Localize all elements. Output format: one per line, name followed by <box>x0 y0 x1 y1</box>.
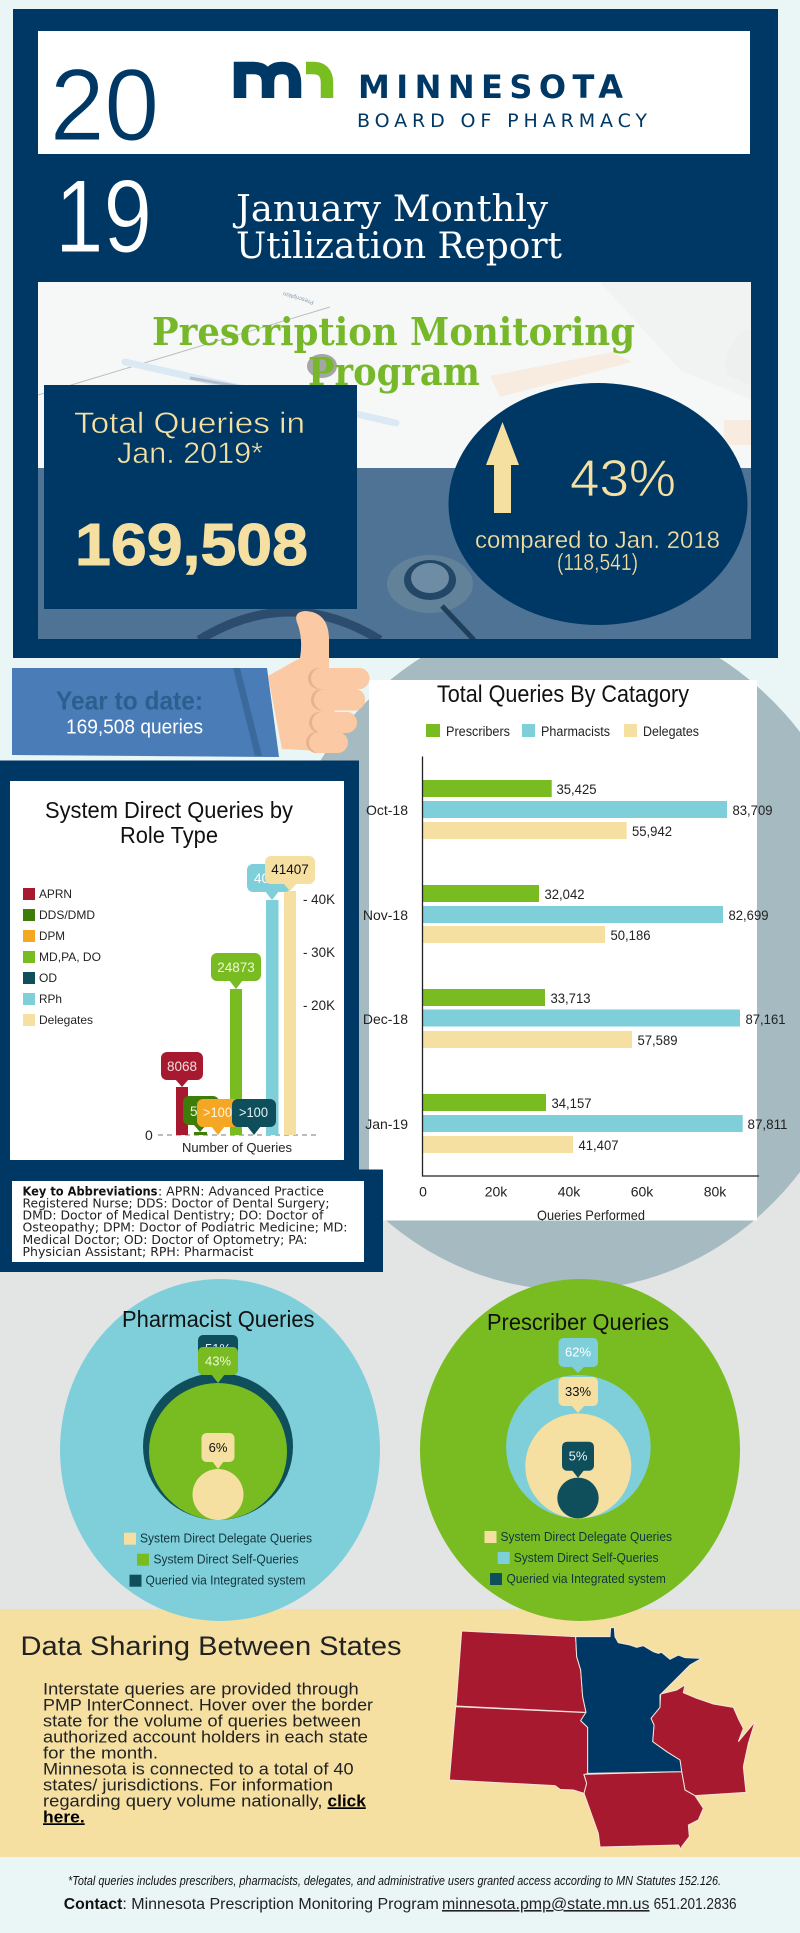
role y axis labels: - 20K <box>303 997 336 1013</box>
callout: 43 percent increase: compared to Jan. 2018 <box>475 527 720 554</box>
contact line: minnesota.pmp@state.mn.us <box>442 1896 650 1913</box>
bar chart: Dec-18 <box>363 989 786 1048</box>
tooltip: OD over 100 <box>232 1099 276 1135</box>
role y axis labels <box>145 891 336 1143</box>
heading line two: Program <box>308 349 480 394</box>
map: Minnesota and border states <box>449 1628 755 1850</box>
map: Iowa <box>584 1772 703 1850</box>
photo banner <box>38 282 751 640</box>
data sharing body text: state for the volume of queries between <box>43 1711 361 1730</box>
nested circles chart <box>143 1373 293 1520</box>
report title: January Monthly <box>232 189 549 230</box>
callout: 43 percent increase: (118,541) <box>557 549 638 575</box>
role legend: DPM <box>39 929 65 943</box>
tooltip: RPh partly hidden <box>247 864 291 900</box>
bar chart: Oct-18: Oct-18 <box>366 802 408 818</box>
report title <box>232 189 563 267</box>
tooltip: OD over 100: >100 <box>239 1105 268 1120</box>
data sharing body text: for the month. <box>43 1743 158 1762</box>
tooltip: self 43 percent <box>198 1347 238 1383</box>
chart axes: 60k <box>631 1184 654 1200</box>
callout: 43 percent increase <box>448 383 748 625</box>
chart title: Total Queries By Catagory <box>437 681 689 708</box>
data sharing body text: states/ jurisdictions. For information <box>43 1775 333 1794</box>
tooltip: integrated 5 percent: 5% <box>569 1449 588 1464</box>
role y axis labels: 0 <box>145 1127 153 1143</box>
tooltip: DPM over 100: >100 <box>203 1105 232 1120</box>
tooltip: MD PA DO 24873 <box>211 953 261 989</box>
map: South Dakota <box>449 1707 588 1793</box>
chart axes: 20k <box>485 1184 508 1200</box>
data sharing body text: here. <box>43 1807 85 1826</box>
prescriber legend <box>484 1529 672 1586</box>
data sharing body text: Minnesota is connected to a total of 40 <box>43 1759 354 1778</box>
chart axes: 80k <box>704 1184 727 1200</box>
role legend <box>23 887 101 1027</box>
tooltip: self 62 percent: 62% <box>565 1345 591 1360</box>
bar chart: Dec-18: 33,713 <box>550 990 591 1006</box>
abbreviations text: Osteopathy; DPM: Doctor of Podiatric Medicine; MD: <box>22 1221 348 1235</box>
logo wordmark <box>357 68 647 132</box>
pharmacist heading: Pharmacist Queries <box>122 1306 314 1332</box>
prescriber legend: Queried via Integrated system <box>506 1571 666 1586</box>
panel: total queries: 169,508 <box>75 512 308 578</box>
program heading: Prescription Monitoring <box>152 309 635 354</box>
data sharing body text: authorized account holders in each state <box>43 1727 368 1746</box>
tooltip: Delegates 41407: 41407 <box>271 862 309 877</box>
role legend: DDS/DMD <box>39 908 95 922</box>
bar chart: Jan-19 <box>365 1094 788 1153</box>
bar chart: Nov-18: Nov-18 <box>363 907 408 923</box>
role chart baseline <box>158 1134 316 1136</box>
tooltip: delegate 33 percent <box>558 1377 598 1413</box>
abbreviations text: Physician Assistant; RPH: Pharmacist <box>22 1245 254 1259</box>
data sharing heading: Data Sharing Between States <box>20 1631 402 1661</box>
tooltip: delegate 6 percent <box>202 1433 234 1469</box>
decorative large circle behind category chart <box>267 614 800 1290</box>
bar chart: Jan-19: 87,811 <box>748 1116 788 1132</box>
role y axis labels: - 40K <box>303 891 336 907</box>
bar chart: Jan-19: Jan-19 <box>365 1116 408 1132</box>
icon: mn logo mark <box>240 68 327 98</box>
contact line: Contact <box>64 1896 123 1913</box>
abbreviations text: DMD: Doctor of Medical Dentistry; DO: Doctor of <box>22 1209 324 1223</box>
year to date text: 169,508 queries <box>66 716 203 738</box>
abbreviations text: Key to Abbreviations <box>22 1184 158 1198</box>
panel: prescriber queries <box>420 1279 740 1621</box>
bar chart: Oct-18 <box>366 780 773 839</box>
role legend: APRN <box>39 887 72 901</box>
panel: total queries: Jan. 2019* <box>117 437 263 470</box>
panel: system direct queries by role <box>0 760 359 1172</box>
data sharing body text <box>43 1679 373 1826</box>
role legend: MD,PA, DO <box>39 950 101 964</box>
prescriber heading: Prescriber Queries <box>487 1309 669 1335</box>
callout: 43 percent increase: 43% <box>570 450 676 508</box>
contact line: : Minnesota Prescription Monitoring Program <box>122 1896 439 1913</box>
role chart title: Role Type <box>120 822 218 848</box>
bar chart: Oct-18: 35,425 <box>556 781 597 797</box>
role legend: OD <box>39 971 57 985</box>
bar chart: Nov-18 <box>363 885 769 943</box>
chart legend: Pharmacists <box>541 724 610 739</box>
year part 20: 20 <box>50 48 159 162</box>
chart axes: 0 <box>419 1184 427 1200</box>
panel: header <box>13 9 778 658</box>
bar chart: Nov-18: 50,186 <box>610 927 651 943</box>
tooltip: APRN 8068 <box>161 1052 203 1087</box>
tooltip: APRN 8068: 8068 <box>167 1059 197 1074</box>
chart axes: Queries Performed <box>537 1207 645 1223</box>
report title: Utilization Report <box>236 226 563 267</box>
role legend: RPh <box>39 992 62 1006</box>
chart legend: Prescribers <box>446 724 510 739</box>
tooltip: integrated 51 percent: 51% <box>205 1341 231 1356</box>
abbreviations text: Medical Doctor; OD: Doctor of Optometry; PA: <box>22 1233 308 1247</box>
tooltip: Delegates 41407 <box>265 856 315 891</box>
chart axes <box>419 756 759 1223</box>
tooltip: self 43 percent: 43% <box>205 1354 231 1368</box>
data sharing body text: click <box>328 1791 366 1810</box>
pharmacist legend <box>124 1531 312 1588</box>
chart axes: 40k <box>558 1184 581 1200</box>
tooltip: DDS DMD partly hidden: 5 <box>190 1104 198 1119</box>
tooltip: DPM over 100 <box>197 1099 239 1135</box>
panel: category chart <box>363 680 788 1223</box>
tooltip: RPh partly hidden: 40 <box>254 871 269 886</box>
bar chart: Oct-18: 83,709 <box>732 802 773 818</box>
tooltip: MD PA DO 24873: 24873 <box>217 960 255 975</box>
icon: thumbs up hand with sleeve <box>12 611 370 757</box>
contact line <box>64 1896 737 1913</box>
tooltip: delegate 33 percent: 33% <box>565 1384 591 1399</box>
bar chart: Dec-18: Dec-18 <box>363 1011 408 1027</box>
logo wordmark: BOARD OF PHARMACY <box>357 110 647 132</box>
pharmacist legend: Queried via Integrated system <box>146 1573 306 1588</box>
data sharing body text: PMP InterConnect. Hover over the border <box>43 1695 373 1714</box>
panel: pharmacist queries <box>60 1279 380 1621</box>
pharmacist legend: System Direct Delegate Queries <box>140 1531 312 1546</box>
map: Wisconsin <box>651 1685 755 1796</box>
axis title: number of queries: Number of Queries <box>182 1140 292 1155</box>
bar chart: Oct-18: 55,942 <box>632 823 672 839</box>
year to date text: Year to date: <box>56 686 203 716</box>
role y axis labels: - 30K <box>303 944 336 960</box>
year part 19: 19 <box>55 159 152 275</box>
bar chart: Jan-19: 34,157 <box>552 1095 592 1111</box>
arrow: up <box>486 422 519 513</box>
tooltip: integrated 5 percent <box>562 1442 594 1478</box>
role chart title: System Direct Queries by <box>45 797 293 823</box>
tooltip: delegate 6 percent: 6% <box>209 1440 228 1455</box>
panel: total queries <box>44 385 357 609</box>
nested circles chart <box>506 1375 651 1518</box>
photo banner: Prescription <box>283 290 315 305</box>
role bars <box>176 891 296 1135</box>
abbreviations text <box>22 1184 348 1259</box>
data sharing body text: Interstate queries are provided through <box>43 1679 359 1698</box>
bar chart: Dec-18: 87,161 <box>746 1011 786 1027</box>
bar chart: Jan-19: 41,407 <box>578 1137 619 1153</box>
abbreviations text: Registered Nurse; DDS: Doctor of Dental Surgery; <box>22 1197 330 1211</box>
map: North Dakota <box>456 1631 586 1712</box>
panel: key to abbreviations <box>0 1170 383 1272</box>
logo panel <box>38 31 750 162</box>
prescriber legend: System Direct Self-Queries <box>514 1550 659 1565</box>
data sharing body text: regarding query volume nationally, <box>43 1791 322 1810</box>
role legend: Delegates <box>39 1013 93 1027</box>
tooltip: integrated 51 percent <box>198 1335 238 1369</box>
year to date text <box>56 686 203 738</box>
chart legend <box>426 724 699 739</box>
logo wordmark: MINNESOTA <box>358 68 623 106</box>
tooltip: DDS DMD partly hidden <box>183 1096 219 1132</box>
chart legend: Delegates <box>643 724 699 739</box>
map: Minnesota <box>576 1628 702 1773</box>
abbreviations text: : APRN: Advanced Practice <box>158 1184 324 1198</box>
role chart title <box>45 797 293 848</box>
tooltip: self 62 percent <box>558 1338 598 1373</box>
contact line: 651.201.2836 <box>654 1896 737 1913</box>
bar chart: Nov-18: 32,042 <box>544 886 585 902</box>
pharmacist legend: System Direct Self-Queries <box>154 1552 299 1567</box>
prescriber legend: System Direct Delegate Queries <box>500 1529 672 1544</box>
panel: total queries: Total Queries in <box>74 407 305 440</box>
bar chart: Dec-18: 57,589 <box>638 1032 678 1048</box>
bar chart: Nov-18: 82,699 <box>728 907 769 923</box>
panel: data sharing <box>20 1628 755 1850</box>
footer <box>64 1873 737 1913</box>
